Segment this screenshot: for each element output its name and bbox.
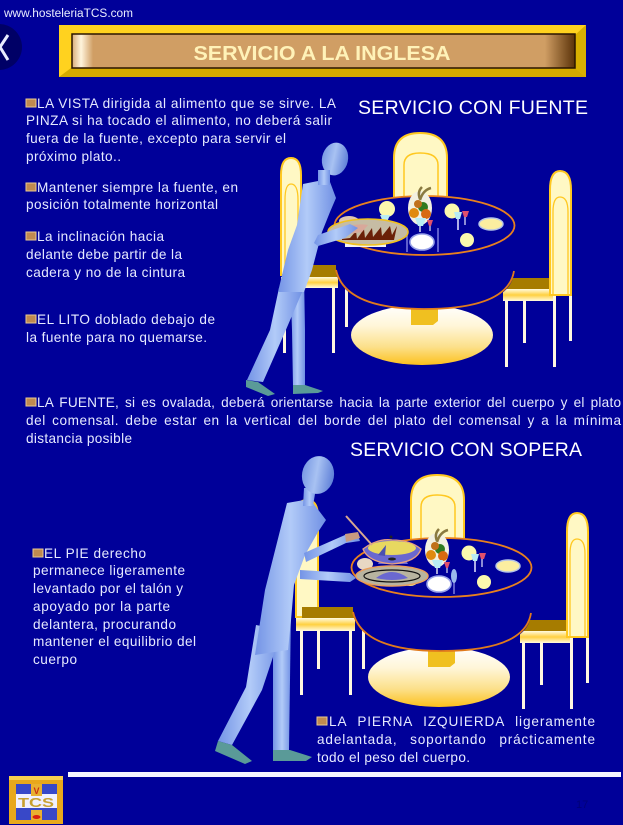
icon: back button [0,24,22,70]
scene: servicio con fuente [246,133,572,396]
table base [368,647,510,707]
icon: TCS logo: TCS [18,795,54,810]
text block: el pie: delantera, procurando [33,617,176,632]
title banner [59,25,586,77]
heading: servicio con fuente: SERVICIO CON FUENTE [358,97,588,119]
title: SERVICIO A LA INGLESA [194,43,450,65]
text block: la vista: próximo plato.. [26,149,121,164]
text block: la pierna izquierda: adelantada, soportando prácticamente [317,732,595,747]
text block: inclinacion: delante debe partir de la [26,247,182,262]
text block: la fuente [26,395,621,446]
person [246,140,358,396]
table skirt [336,226,514,309]
icon: TCS logo: V [33,786,40,796]
text block: la fuente: distancia posible [26,431,132,446]
text block: el pie: cuerpo [33,652,77,667]
right chair [503,171,572,367]
text block: la vista: PINZA si ha tocado el alimento, no deberá salir [26,113,332,128]
text block: el pie: mantener el equilibrio del [33,634,196,649]
table settings [379,187,503,252]
text block: mantener: posición totalmente horizontal [26,197,218,212]
text block: la pierna izquierda: LA PIERNA IZQUIERDA ligeramente [329,714,595,729]
text block: inclinacion [26,229,185,280]
text block: la vista [26,96,337,164]
page number: 17 [576,799,588,811]
text block: el pie: levantado por el talón y [33,581,183,596]
table base [351,305,493,365]
text block: el pie [33,546,196,667]
soup tureen on tray [346,516,428,586]
text block: la pierna izquierda [317,714,595,765]
text block: lito [26,312,215,345]
right chair [520,513,589,709]
text block: el pie: permanece ligeramente [33,563,185,578]
center chair [394,133,447,198]
table skirt [353,568,531,651]
left chair [281,158,348,353]
table settings [425,529,520,594]
text block: la fuente: LA FUENTE, si es ovalada, deberá orientarse hacia la parte exterior del cuerpo y el plato [37,395,621,410]
website url: www.hosteleriaTCS.com [3,8,133,20]
left chair [296,500,365,695]
table top [352,538,532,597]
text block: la vista: LA VISTA dirigida al alimento que se sirve. LA [37,96,337,111]
text block: mantener: Mantener siempre la fuente, en [37,180,238,195]
text block: el pie: EL PIE derecho [44,546,146,561]
center chair [411,475,464,540]
heading: servicio con sopera: SERVICIO CON SOPERA [350,439,582,461]
person [215,454,360,764]
text block: inclinacion: cadera y no de la cintura [26,265,185,280]
scene: servicio con sopera [215,454,589,764]
text block: lito: EL LITO doblado debajo de [37,312,215,327]
table pedestal [411,309,438,325]
text block: la vista: fuera de la fuente, excepto para servir el [26,131,286,146]
text block: mantener [26,180,238,212]
text block: lito: la fuente para no quemarse. [26,330,207,345]
text block: la fuente: del comensal. debe estar en la vertical del borde del plato del comensal y a la mínima [26,413,621,428]
text block: inclinacion: La inclinación hacia [37,229,164,244]
text block: la pierna izquierda: todo el peso del cuerpo. [317,750,470,765]
footer rule [68,772,621,777]
serving tray [328,216,408,247]
icon: TCS logo [9,776,63,824]
table top [334,196,514,255]
table pedestal [428,651,455,667]
text block: el pie: apoyado por la parte [33,599,170,614]
